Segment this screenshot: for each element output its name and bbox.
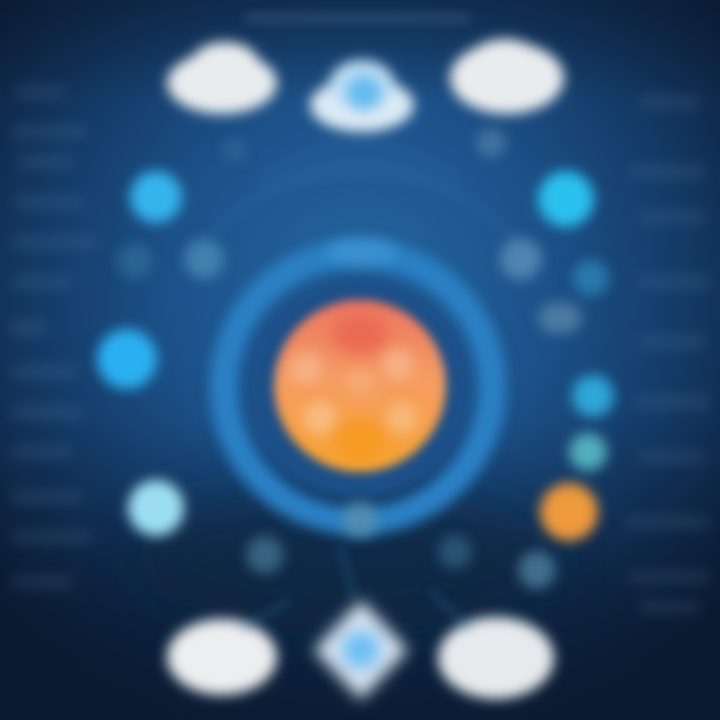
right text column <box>625 95 710 614</box>
cloud: bottom right <box>438 617 554 699</box>
small muted nodes <box>117 128 609 589</box>
node: middle left <box>97 329 157 389</box>
node: upper left <box>130 171 182 223</box>
cloud: top left <box>167 42 277 114</box>
concentric arcs behind the hub <box>205 145 515 240</box>
node: lower left <box>128 480 184 536</box>
hub: outer ring <box>224 238 492 538</box>
cloud: top centre <box>310 60 414 132</box>
node: right blue <box>572 375 614 417</box>
connector lines <box>240 545 470 630</box>
node: upper right <box>538 171 594 227</box>
hub: orange core <box>274 300 446 472</box>
title <box>245 12 470 24</box>
cloud: top right <box>450 39 564 114</box>
diamond: bottom centre <box>314 600 408 700</box>
dark lower centre shading <box>135 490 555 630</box>
left text column <box>10 85 97 589</box>
node: orange <box>540 483 598 541</box>
node: right teal <box>569 433 607 471</box>
cloud: bottom left <box>167 619 277 695</box>
